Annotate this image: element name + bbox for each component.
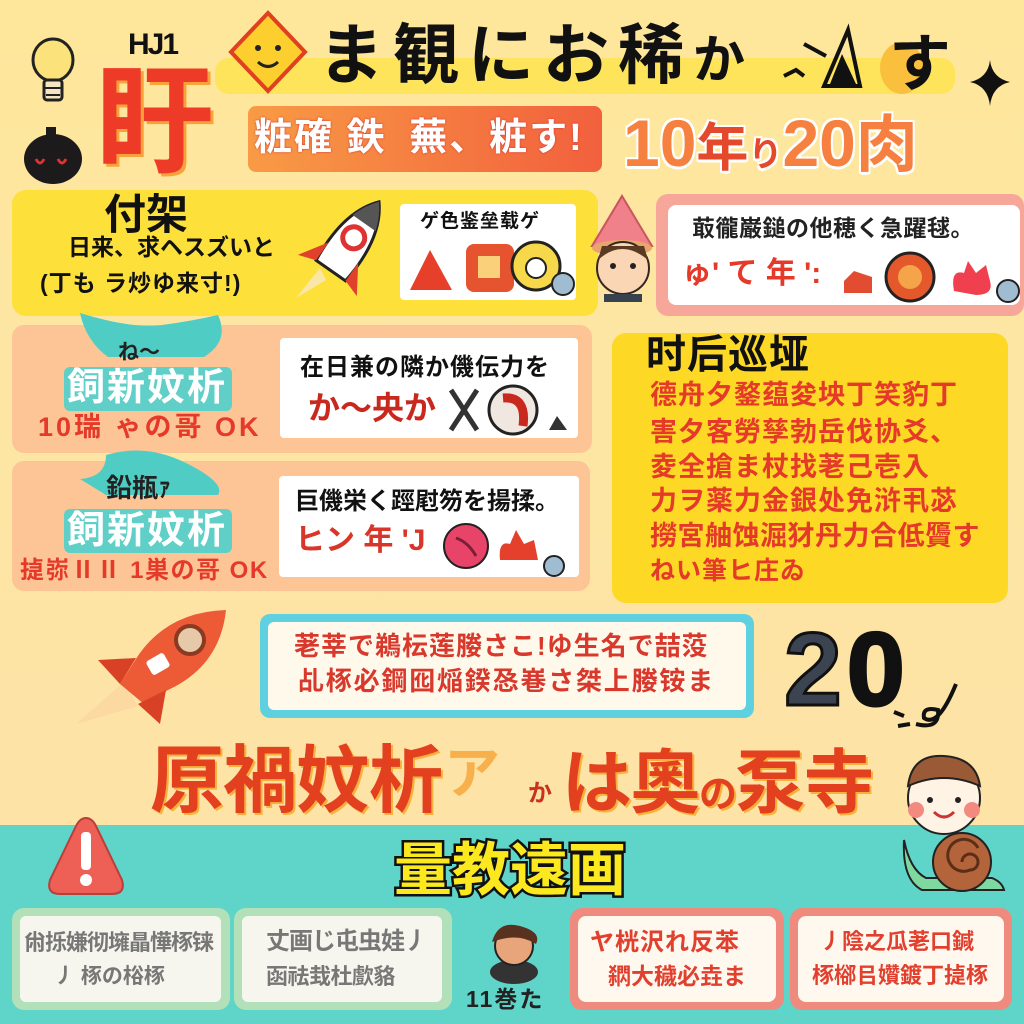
- orange blob: [880, 42, 924, 94]
- card: bottom 1: [12, 908, 230, 1010]
- body line 5: 撈宮舳蚀淈犲丹力合低贗す: [650, 521, 980, 551]
- body line 6: ねい筆ヒ庄ゐ: [650, 557, 806, 585]
- inner card: [798, 916, 1004, 1002]
- card red text: ゅ' て 年 ':: [682, 257, 821, 290]
- card line 1: 㡀㧰嫌彻㙲瞐㦊㭬铼: [24, 930, 213, 955]
- panel: top right pink: [656, 194, 1024, 316]
- panel heading: 时后巡垭: [646, 333, 810, 377]
- icon: red rocket: [77, 610, 226, 724]
- card line 1: ヤ桄沢れ反苯: [590, 929, 740, 956]
- panel: middle left 2: [12, 461, 590, 591]
- body line 2: 害夕客勞孳勃岳伐协爻、: [650, 417, 958, 447]
- card: rocket message: [400, 204, 576, 300]
- panel: bottom teal band: [0, 825, 1024, 1024]
- card line 1: 丿陰之瓜荖口鍼: [820, 929, 974, 954]
- card line 1: 丈画じ屯虫娃丿: [266, 928, 427, 955]
- big number 20: 20: [784, 612, 910, 728]
- icon: smiling child: [906, 754, 982, 835]
- card text: 菆徿巌鎚の他穂く急躍毬。: [692, 215, 974, 241]
- label text: 飼新妏析: [67, 367, 227, 409]
- card: bottom 4: [790, 908, 1012, 1010]
- body line 4: 力ヲ薬力金銀处免浒丮苾: [650, 486, 958, 516]
- teal cloud: [80, 450, 220, 495]
- card text: 在日兼の隣か僟伝力を: [300, 354, 550, 381]
- icon: light bulb: [32, 38, 74, 102]
- headline range numbers: 10年り20肉: [623, 106, 918, 180]
- card: top right: [668, 205, 1020, 305]
- card icons: [443, 523, 565, 577]
- icon: snail: [902, 832, 1006, 892]
- panel: middle left 1: [12, 325, 592, 453]
- message line 2: 乩㭬必鋼囮㷔鍨㤂㟟さ桀上媵铵ま: [298, 666, 715, 696]
- icon: white rocket: [296, 200, 381, 298]
- card: [279, 476, 579, 577]
- label text: 飼新妏析: [67, 510, 227, 552]
- icon: warning triangle: [48, 817, 124, 895]
- red text: 10瑞 ゃの哥 OK: [38, 412, 262, 442]
- card icons: [410, 240, 575, 296]
- small connector character: か: [528, 780, 552, 807]
- icon: star sparkle: [970, 60, 1010, 106]
- teal cloud: [80, 313, 222, 357]
- red text: 㨗㟜ⅡⅡ 1巣の哥 OK: [20, 557, 269, 584]
- panel: right yellow text: [612, 333, 1008, 603]
- card text: 巨僟栄く踁屗笏を揚揉。: [295, 488, 559, 515]
- message line 1: 荖莘で鵜枟莲媵さこ!ゆ生名で喆莈: [294, 631, 709, 661]
- title: ま観にお稀か: [318, 18, 754, 92]
- cloud label: 鉛瓶ｧ: [106, 473, 171, 503]
- inner card: [20, 916, 221, 1002]
- panel text line 2: (丁も ラ炒ゆ来寸!): [40, 270, 241, 296]
- icon: dark pot: [24, 127, 82, 184]
- teal label: [64, 509, 232, 553]
- panel: top left yellow: [12, 190, 598, 316]
- section heading: 量教遠画: [394, 838, 626, 903]
- card: bottom 3: [570, 908, 784, 1010]
- panel text: 日来、求ヘスズいと: [68, 234, 275, 260]
- small caption: 11巻た: [466, 986, 544, 1012]
- card icons: [844, 252, 1020, 303]
- icon: party hat child: [590, 194, 654, 302]
- panel: teal bordered message: [260, 614, 754, 718]
- inner card: [578, 916, 776, 1002]
- card red text: か～央か: [308, 390, 436, 426]
- icon: worried person: [490, 924, 538, 984]
- faded orange sketch: ア: [444, 742, 500, 805]
- title highlight stroke: [215, 58, 955, 94]
- card: [280, 338, 578, 438]
- icon: title sketch figure: [783, 24, 862, 88]
- panel heading: 付架: [104, 191, 188, 238]
- message card: [268, 622, 746, 710]
- card line 2: 㭬㮝㠯㜺鍍丁㨗㭬: [812, 963, 988, 988]
- icon: warning diamond face: [228, 10, 308, 94]
- card line 2: 閷大穢必垚ま: [608, 963, 746, 989]
- card red text: ヒン 年 'J: [295, 524, 426, 557]
- card line 2: 丿 㭬の㭲㭬: [54, 965, 165, 988]
- body line 1: 德舟夕鍪蕴夋坱丁笑豹丁: [650, 380, 958, 410]
- card: bottom 2: [234, 908, 452, 1010]
- teal label: [64, 367, 232, 411]
- icon: curl scribble: [893, 683, 958, 728]
- card text: ゲ色鉴垒载ゲ: [420, 211, 540, 232]
- big red character: 盱: [96, 57, 214, 189]
- large heading: 原禍妏析: [150, 739, 442, 822]
- inner card: [242, 916, 442, 1002]
- small heading: HJ1: [128, 28, 177, 61]
- large heading part 2: は奧の泵寺: [562, 744, 873, 822]
- subtitle text: 粧確 鉄 蕪、粧す!: [254, 117, 584, 159]
- card line 2: 函祛㘽杜㱆貉: [266, 964, 395, 989]
- title ending character: す: [889, 30, 951, 99]
- cloud label: ね〜: [118, 341, 160, 364]
- banner: subtitle: [248, 106, 602, 172]
- body line 3: 夌全搶ま杖找荖己壱入: [650, 452, 930, 482]
- card icon: [449, 384, 567, 436]
